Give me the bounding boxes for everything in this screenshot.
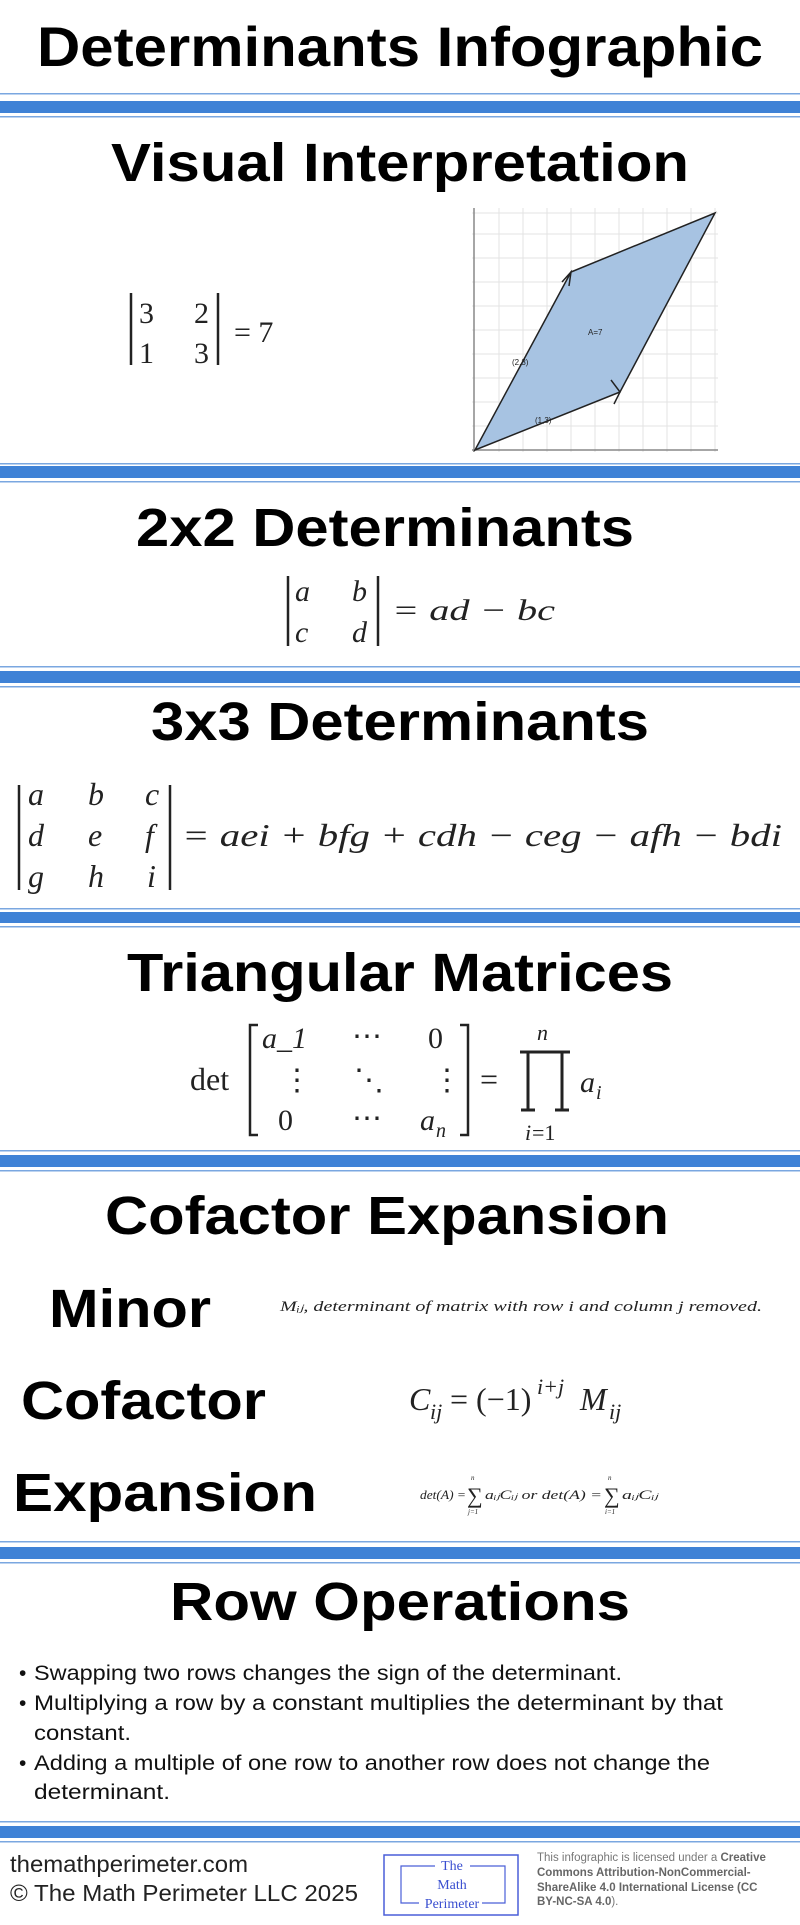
- license text: BY-NC-SA 4.0).: [537, 1896, 618, 1908]
- formula 3x3: g: [28, 858, 44, 894]
- panel: row operations: [19, 1572, 723, 1804]
- formula triangular: 0: [428, 1022, 443, 1055]
- formula triangular: ⋮: [282, 1064, 312, 1097]
- formula triangular: =1: [532, 1120, 555, 1145]
- formula 2x2: d: [352, 616, 368, 649]
- license text: [537, 1852, 766, 1908]
- formula triangular: a: [420, 1104, 435, 1137]
- cofactor formula: = (−1): [450, 1381, 531, 1417]
- bullet list: •: [19, 1692, 26, 1715]
- panel: cofactor expansion: [13, 1186, 762, 1523]
- formula 3x3: a: [28, 776, 44, 812]
- bullet list: determinant.: [34, 1781, 170, 1804]
- heading: cofactor expansion: Cofactor Expansion: [105, 1186, 669, 1246]
- expansion formula: i=1: [605, 1508, 615, 1516]
- bullet list: Multiplying a row by a constant multiplies the determinant by that: [34, 1692, 723, 1715]
- bullet list: constant.: [34, 1722, 131, 1745]
- expansion formula: ∑: [604, 1483, 620, 1508]
- panel: visual interpretation: [111, 133, 718, 454]
- bullet list: •: [19, 1662, 26, 1685]
- cofactor formula: ij: [609, 1399, 621, 1424]
- expansion formula: aᵢⱼCᵢⱼ: [622, 1487, 659, 1502]
- formula 2x2: c: [295, 616, 308, 649]
- formula triangular: det: [190, 1061, 229, 1097]
- license text: This infographic is licensed under a Creative: [537, 1852, 766, 1864]
- title: Determinants Infographic: [37, 15, 763, 78]
- expansion formula: aᵢⱼCᵢⱼ or det(A) =: [485, 1487, 602, 1502]
- expansion formula: n: [471, 1474, 475, 1482]
- matrix equation 3 2 1 3 = 7: 1: [139, 337, 154, 370]
- label: minor: Minor: [49, 1279, 211, 1339]
- formula triangular: ⋮: [432, 1064, 462, 1097]
- formula triangular: 0: [278, 1104, 293, 1137]
- chart: parallelogram: (2,3): [512, 358, 529, 367]
- formula triangular: ⋱: [354, 1064, 384, 1097]
- cofactor formula: [409, 1374, 621, 1424]
- footer: [10, 1851, 766, 1915]
- formula 3x3: h: [88, 858, 104, 894]
- bullet list: Adding a multiple of one row to another row does not change the: [34, 1752, 710, 1775]
- heading: visual interpretation: Visual Interpretation: [111, 133, 689, 193]
- expansion formula: ∑: [467, 1483, 483, 1508]
- license text: Commons Attribution-NonCommercial-: [537, 1867, 751, 1879]
- formula triangular: a_1: [262, 1022, 307, 1055]
- expansion formula: [420, 1474, 659, 1516]
- panel: triangular matrices: [127, 943, 673, 1145]
- cofactor formula: C: [409, 1381, 431, 1417]
- heading: triangular: Triangular Matrices: [127, 943, 673, 1003]
- formula 3x3: e: [88, 817, 102, 853]
- panel: 3x3 determinants: [19, 692, 782, 894]
- chart: parallelogram: (1,3): [535, 416, 552, 425]
- bullet list: [19, 1662, 723, 1804]
- bullet list: •: [19, 1752, 26, 1775]
- bullet list: Swapping two rows changes the sign of the determinant.: [34, 1662, 622, 1685]
- logo: Math: [437, 1878, 467, 1893]
- formula 2x2: a: [295, 575, 310, 608]
- formula triangular: n: [537, 1020, 548, 1045]
- formula triangular: a: [580, 1066, 595, 1099]
- formula triangular: n: [436, 1120, 446, 1142]
- chart: parallelogram: A=7: [588, 328, 603, 337]
- heading: 2x2: 2x2 Determinants: [136, 498, 634, 558]
- formula triangular: ⋯: [352, 1020, 382, 1053]
- label: expansion: Expansion: [13, 1463, 317, 1523]
- matrix equation 3 2 1 3 = 7: [131, 293, 273, 370]
- matrix equation 3 2 1 3 = 7: 3: [139, 297, 154, 330]
- formula 2x2: = ad − bc: [392, 594, 555, 627]
- cofactor formula: i+j: [537, 1374, 564, 1399]
- label: cofactor: Cofactor: [21, 1371, 266, 1431]
- logo: The: [441, 1859, 463, 1874]
- cofactor formula: M: [579, 1381, 609, 1417]
- formula triangular: =: [480, 1061, 498, 1097]
- formula 2x2: [288, 575, 555, 649]
- formula triangular: i: [525, 1120, 531, 1145]
- expansion formula: det(A) =: [420, 1487, 466, 1502]
- formula 3x3: b: [88, 776, 104, 812]
- logo: Perimeter: [425, 1897, 480, 1912]
- footer: © The Math Perimeter LLC 2025: [10, 1880, 358, 1906]
- footer: website and copyright: themathperimeter.com: [10, 1851, 248, 1877]
- license text: ShareAlike 4.0 International License (CC: [537, 1882, 758, 1894]
- matrix equation 3 2 1 3 = 7: 2: [194, 297, 209, 330]
- matrix equation 3 2 1 3 = 7: 3: [194, 337, 209, 370]
- formula triangular: [190, 1020, 602, 1145]
- panel: 2x2 determinants: [136, 498, 634, 649]
- formula 3x3: d: [28, 817, 45, 853]
- formula 3x3: f: [145, 817, 158, 853]
- formula triangular: i: [596, 1082, 602, 1104]
- logo: [384, 1855, 518, 1915]
- formula 3x3: [19, 776, 782, 894]
- matrix equation 3 2 1 3 = 7: = 7: [234, 316, 273, 349]
- heading: 3x3: 3x3 Determinants: [151, 692, 649, 752]
- formula 2x2: b: [352, 575, 367, 608]
- cofactor formula: ij: [430, 1399, 442, 1424]
- formula triangular: ⋯: [352, 1102, 382, 1135]
- formula 3x3: i: [147, 858, 156, 894]
- formula 3x3: c: [145, 776, 159, 812]
- expansion formula: n: [608, 1474, 612, 1482]
- expansion formula: j=1: [467, 1508, 478, 1516]
- heading: row operations: Row Operations: [170, 1572, 630, 1632]
- formula 3x3: = aei + bfg + cdh − ceg − afh − bdi: [182, 817, 782, 853]
- chart: parallelogram: [470, 206, 718, 454]
- minor definition: Mᵢⱼ, determinant of matrix with row i and column j removed.: [279, 1299, 762, 1315]
